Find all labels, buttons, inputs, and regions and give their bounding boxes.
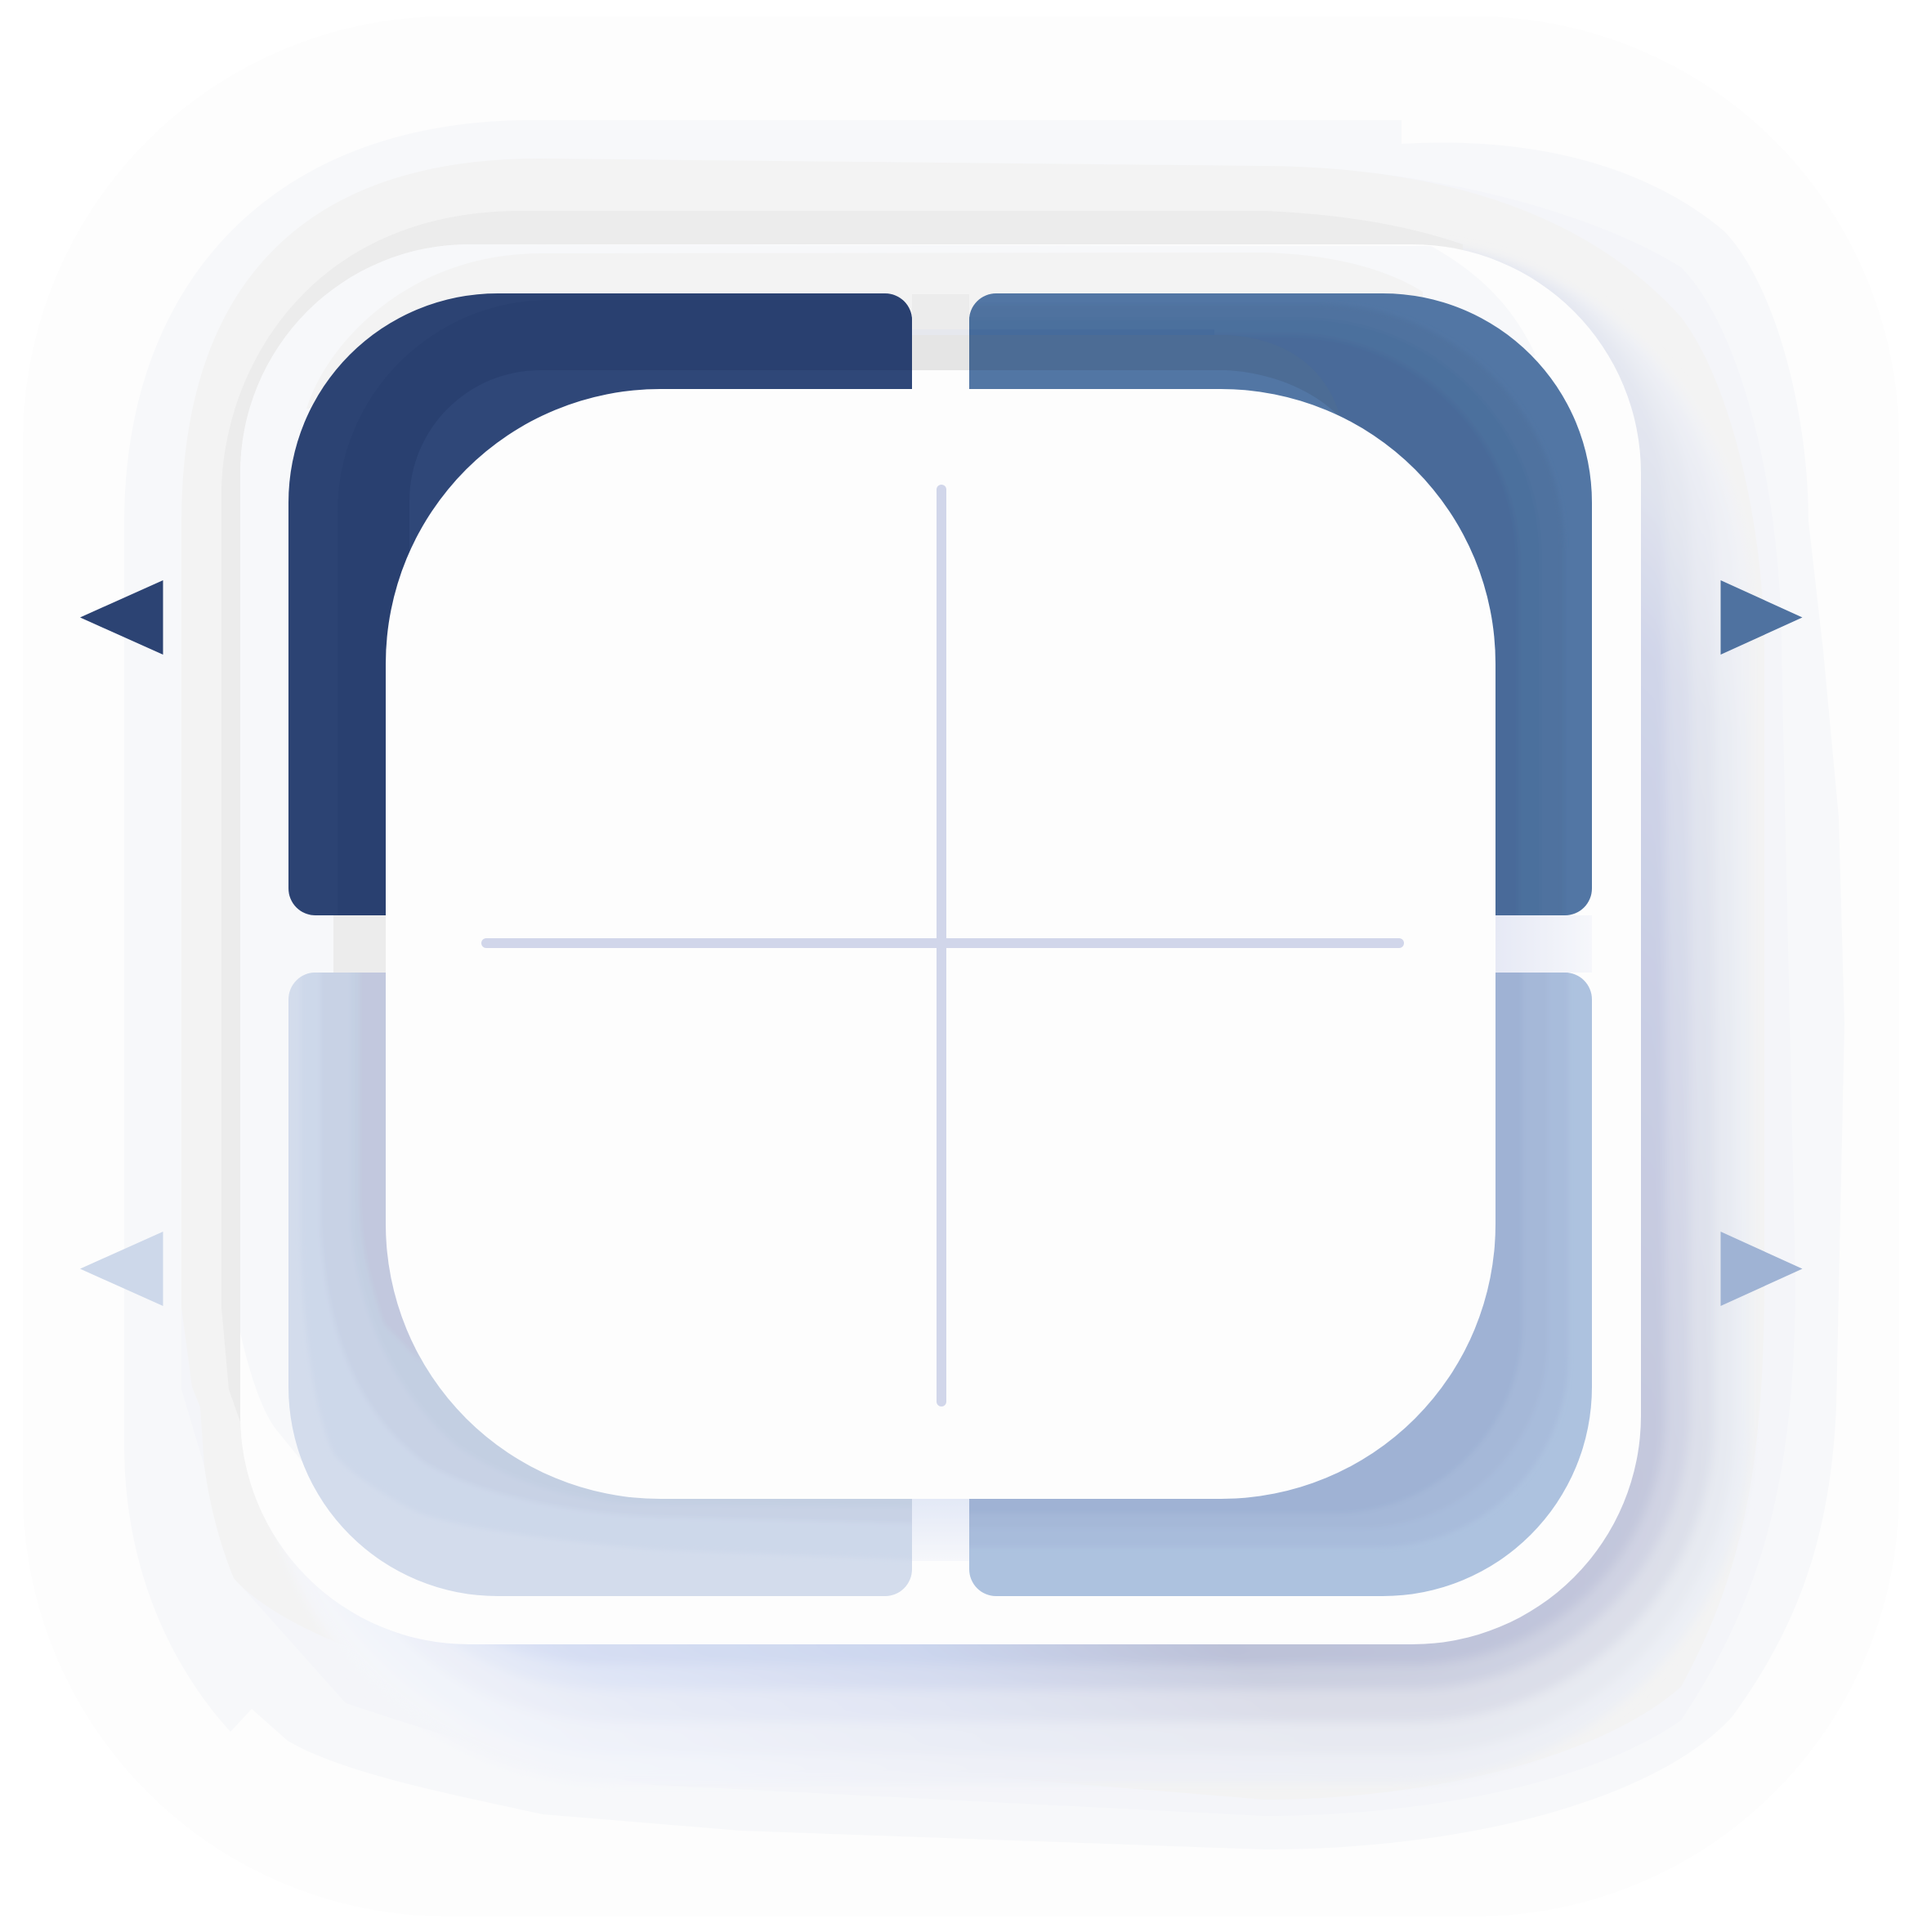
center card xyxy=(386,389,1496,1499)
arrow: bottom-right xyxy=(1721,1232,1803,1306)
panel: top-right quadrant xyxy=(969,293,1592,915)
panel: bottom-left quadrant xyxy=(288,940,940,1596)
horizontal axis line xyxy=(481,938,1404,948)
arrow: bottom-left xyxy=(80,1232,163,1306)
panel: bottom-right quadrant xyxy=(940,940,1592,1596)
arrow: top-left xyxy=(80,580,163,655)
panel: top-left quadrant xyxy=(288,293,912,915)
vertical axis line xyxy=(937,485,946,1407)
outer card xyxy=(240,244,1641,1644)
arrow: top-right xyxy=(1721,580,1803,655)
